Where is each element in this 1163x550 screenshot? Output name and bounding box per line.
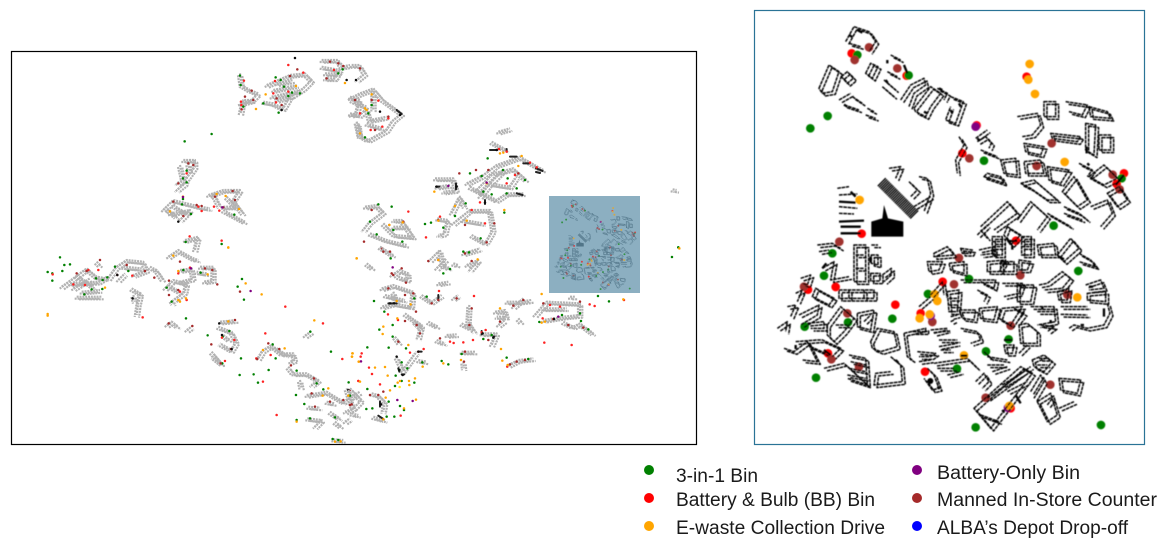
legend item: 3-in-1 Bin	[644, 465, 758, 487]
legend item: Battery and Bulb Bin: Battery & Bulb (BB) Bin	[676, 490, 875, 511]
building clusters and points: south-west	[48, 247, 362, 443]
points: southern half	[804, 234, 1101, 427]
building clusters and points: north-west	[161, 58, 362, 253]
legend	[644, 463, 1158, 539]
building clusters and points: north-east	[348, 65, 679, 248]
legend item: ALBA's Depot Drop-off: ALBA’s Depot Drop-off	[937, 518, 1129, 539]
panel: detail map	[754, 10, 1144, 444]
points: northern half	[810, 47, 1124, 226]
legend item: E-waste Collection Drive: E-waste Collection Drive	[676, 518, 885, 539]
legend item: Manned In-Store Counter: Manned In-Store Counter	[937, 490, 1158, 511]
building footprints: northern half	[819, 27, 1130, 237]
building clusters and points: south-east	[348, 247, 679, 423]
highlighted detail area	[549, 196, 640, 293]
detail map content	[777, 27, 1130, 431]
legend item: 3-in-1 Bin: 3-in-1 Bin	[676, 466, 758, 487]
panel: overview map	[12, 52, 696, 444]
building footprints: southern half	[777, 225, 1113, 431]
legend item: Battery-Only Bin: Battery-Only Bin	[937, 463, 1080, 484]
miniature of detail area inside highlight	[554, 200, 637, 290]
